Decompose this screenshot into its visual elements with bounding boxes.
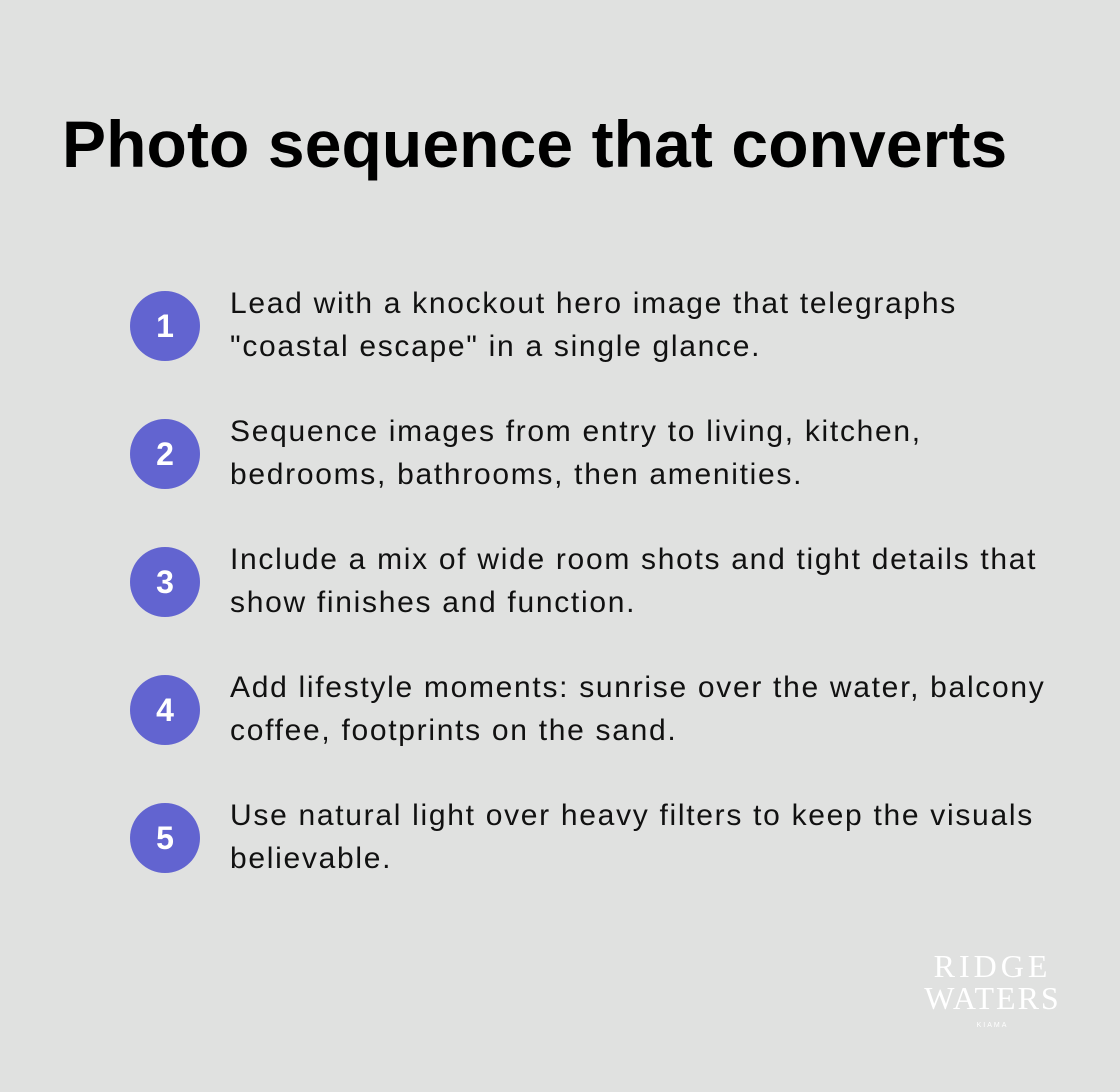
text 5: believable. — [230, 842, 392, 875]
text 1: Lead with a knockout hero image that telegraphs — [230, 287, 957, 320]
text 2 — [230, 415, 922, 491]
badge 2: 2 — [156, 436, 174, 472]
logo — [924, 948, 1061, 1029]
text 4 — [230, 671, 1045, 747]
text 4: coffee, footprints on the sand. — [230, 714, 677, 747]
text 4: Add lifestyle moments: sunrise over the water, balcony — [230, 671, 1045, 704]
text 1: "coastal escape" in a single glance. — [230, 330, 761, 363]
step 5 — [130, 799, 1034, 875]
badge 4: 4 — [156, 692, 174, 728]
badge 2 — [130, 419, 200, 489]
text 3: show finishes and function. — [230, 586, 636, 619]
step 3 — [130, 543, 1037, 619]
step 2 — [130, 415, 922, 491]
text 3: Include a mix of wide room shots and tight details that — [230, 543, 1037, 576]
badge 4 — [130, 675, 200, 745]
badge 5 — [130, 803, 200, 873]
logo: WATERS — [924, 980, 1061, 1016]
text 2: Sequence images from entry to living, kitchen, — [230, 415, 922, 448]
badge 1: 1 — [156, 308, 174, 344]
badge 3 — [130, 547, 200, 617]
text 3 — [230, 543, 1037, 619]
text 2: bedrooms, bathrooms, then amenities. — [230, 458, 803, 491]
step 1 — [130, 287, 957, 363]
text 1 — [230, 287, 957, 363]
text 5: Use natural light over heavy filters to keep the visuals — [230, 799, 1034, 832]
badge 5: 5 — [156, 820, 174, 856]
step 4 — [130, 671, 1045, 747]
badge 3: 3 — [156, 564, 174, 600]
logo: RIDGE — [934, 948, 1051, 984]
title: Photo sequence that converts — [62, 107, 1007, 181]
logo: KIAMA — [977, 1022, 1008, 1029]
text 5 — [230, 799, 1034, 875]
badge 1 — [130, 291, 200, 361]
